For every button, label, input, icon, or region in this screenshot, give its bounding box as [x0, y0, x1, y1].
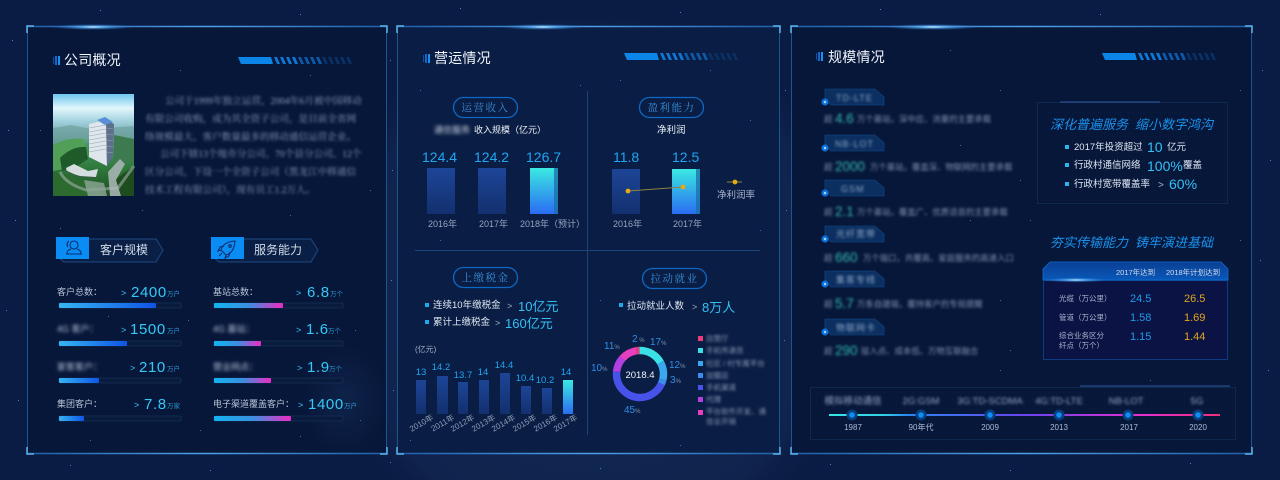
item: IoT cards: 接入点、成本低、万物互联融合	[861, 346, 979, 356]
bar chart: revenue: 2016年	[428, 218, 457, 229]
item: leased lines: 集客专线	[836, 274, 876, 285]
bar chart: tax by year: 14.2	[432, 362, 450, 373]
item: fibre broadband: 超	[824, 253, 833, 263]
metric: total customers: >	[121, 288, 126, 298]
donut legend: 代理	[706, 394, 721, 404]
timeline: NB-LOT	[1109, 396, 1144, 407]
metric: group customers: 集团客户：	[57, 398, 102, 409]
item: TD-LTE: 超	[824, 114, 833, 124]
metric: group customers: >	[134, 400, 139, 410]
timeline: 2009	[981, 423, 999, 432]
heading: transmission: 铸牢演进基础	[1135, 235, 1215, 250]
section: employment	[591, 268, 766, 426]
donut percentages: 2 %	[632, 334, 645, 345]
donut percentages	[591, 334, 686, 416]
metric: service outlets: 1.9	[307, 359, 330, 376]
item: NB-IoT: 2000	[835, 159, 865, 174]
metric: service outlets	[213, 359, 343, 383]
bar chart: net profit: 12.5	[672, 149, 699, 165]
timeline: 5G	[1191, 396, 1203, 407]
tax facts: >	[507, 301, 512, 311]
panel stars	[40, 65, 371, 441]
top glow	[885, 24, 981, 30]
item: fibre broadband: 光纤宽带	[836, 228, 876, 239]
table: transmission capacity: 1.44	[1184, 331, 1205, 343]
donut legend	[698, 333, 766, 426]
tab: service capacity: 服务能力	[254, 242, 302, 257]
tax facts: 10亿元	[518, 299, 558, 314]
timeline: 3G:TD-SCDMA	[957, 396, 1023, 407]
metric: total customers: 万户	[167, 289, 180, 298]
metric: total customers	[57, 284, 181, 308]
item: TD-LTE: TD-LTE	[836, 93, 873, 103]
box: universal service	[1038, 102, 1228, 204]
bar chart: revenue: 2017年	[479, 218, 508, 229]
company description: 技术工程有限公司），现有员工1.2万人。	[145, 184, 315, 196]
metric: base stations	[213, 284, 344, 308]
heading decoration	[1102, 53, 1216, 60]
item: TD-LTE	[821, 89, 992, 126]
pill	[640, 98, 704, 118]
metric: 4G base stations: 1.6	[306, 321, 329, 338]
timeline: 2013	[1050, 423, 1068, 432]
table: transmission capacity: 综合业务区分	[1059, 330, 1104, 340]
top glow	[501, 24, 585, 30]
heading: 营运情况	[434, 50, 491, 66]
pill	[642, 268, 706, 288]
item: GSM: GSM	[841, 184, 865, 194]
company description: 区分公司，下设一个全资子公司（黑龙江中移通信	[145, 166, 356, 178]
chart title: 净利润	[657, 124, 686, 136]
timeline: 90年代	[909, 422, 933, 432]
timeline	[810, 386, 1236, 440]
company description: 公司于1999年独立运营，2004年6月被中国移动	[165, 95, 362, 107]
table: transmission capacity: 光缆（万公里）	[1059, 293, 1112, 303]
table: transmission capacity	[1043, 262, 1228, 360]
donut legend: 自营厅	[706, 333, 729, 343]
heading: transmission	[1050, 235, 1215, 250]
metric: 4G customers: 4G 客户：	[57, 323, 99, 334]
metric: 4G base stations: 万个	[328, 327, 342, 335]
heading: transmission: 夯实传输能力	[1050, 235, 1129, 250]
heading: 缩小数字鸿沟	[1135, 117, 1215, 132]
donut centre label: 2018.4	[625, 370, 655, 381]
panel stars	[410, 70, 761, 446]
company description: 络规模最大、客户数量最多的移动通信运营企业。	[145, 131, 356, 143]
item: GSM: 2.1	[835, 204, 854, 219]
metric: home customers	[57, 359, 181, 383]
item: IoT cards	[821, 319, 979, 358]
table: transmission capacity: 2018年计划达到	[1166, 267, 1220, 277]
bar chart: tax by year: (亿元)	[415, 344, 437, 354]
metric: e-channel customers	[213, 396, 357, 421]
bar chart: tax by year: 2017年	[552, 412, 579, 434]
bar chart: tax by year: 13.7	[454, 370, 472, 381]
company description: 有限公司收购，成为其全资子公司，是目前全省网	[145, 113, 356, 125]
donut legend: 社区 / 村专属平台	[706, 358, 765, 368]
heading decoration	[238, 57, 352, 64]
fact lines: 100%	[1147, 158, 1183, 174]
donut legend: 手机渠道	[706, 382, 736, 392]
donut percentages: 11%	[604, 341, 620, 352]
chart title	[434, 124, 546, 135]
chart title: 通信服务	[434, 124, 470, 135]
metric: service outlets: 营业网点：	[213, 361, 258, 372]
bar chart: net profit	[612, 149, 702, 229]
bar chart: tax by year: 10.2	[536, 375, 554, 386]
timeline: 4G:TD-LTE	[1035, 396, 1083, 407]
fact lines: 60%	[1169, 176, 1197, 192]
item: leased lines: 5.7	[835, 296, 854, 311]
item: leased lines: 超	[824, 299, 833, 309]
donut chart	[616, 350, 664, 398]
table: transmission capacity: 24.5	[1130, 293, 1151, 305]
item: fibre broadband: 660	[835, 250, 858, 265]
metric: home customers: 万户	[167, 364, 180, 373]
photo: headquarters building	[53, 94, 134, 196]
table: transmission capacity: 1.15	[1130, 331, 1151, 343]
donut legend: 信业开销	[706, 416, 736, 426]
item: IoT cards: 290	[835, 343, 858, 358]
donut percentages: 45%	[624, 405, 641, 416]
top glow	[51, 24, 135, 30]
metric: 4G customers: 1500	[130, 321, 166, 338]
metric: base stations: 万个	[330, 290, 344, 298]
timeline: 1987	[844, 423, 862, 432]
metric: service outlets: 万个	[329, 365, 342, 373]
employment fact: 8万人	[702, 300, 735, 315]
item: fibre broadband: 万个端口，共覆高、家庭服务的高速入口	[863, 253, 1014, 263]
pill: 上缴税金	[462, 271, 510, 284]
metric: 4G base stations: 4G 基站：	[213, 323, 255, 334]
donut percentages: 3%	[670, 375, 682, 386]
metric: group customers	[57, 396, 181, 421]
table: transmission capacity: 2017年达到	[1116, 267, 1155, 277]
section: profit	[612, 98, 756, 229]
item: NB-IoT: 万个基站，覆盖深、物联网的主要承载	[870, 162, 1013, 172]
legend: net margin	[717, 180, 756, 201]
metric: home customers: 家客客户：	[57, 361, 102, 372]
metric: 4G customers: 万户	[167, 326, 180, 335]
bar chart: tax by year	[408, 344, 579, 434]
metric: base stations: 6.8	[307, 284, 330, 301]
item: leased lines	[821, 271, 983, 311]
donut percentages: 17%	[650, 337, 667, 348]
icon: rocket	[218, 241, 235, 258]
bar chart: revenue: 124.4	[422, 149, 457, 165]
corner brackets	[791, 26, 1252, 454]
table: transmission capacity: 管道（万公里）	[1059, 312, 1112, 322]
donut percentages: 12%	[669, 360, 686, 371]
item: TD-LTE: 4.6	[835, 111, 854, 126]
icon: users	[66, 241, 82, 254]
bar chart: revenue	[422, 149, 585, 229]
bar chart: tax by year: 13	[416, 367, 426, 378]
fact lines: 覆盖	[1183, 159, 1202, 171]
metric: 4G customers: >	[121, 325, 126, 335]
metric: 4G customers	[57, 321, 181, 346]
donut percentages: 10%	[591, 363, 608, 374]
timeline: 2020	[1189, 423, 1207, 432]
item: NB-IoT	[821, 135, 1013, 174]
fact lines: 亿元	[1167, 141, 1186, 153]
item: IoT cards: 物联网卡	[836, 322, 876, 333]
table: transmission capacity: 1.58	[1130, 312, 1151, 324]
legend: net margin: 净利润率	[717, 189, 756, 201]
tab: customer scale: 客户规模	[100, 242, 148, 257]
panel: company overview	[27, 24, 387, 455]
fact lines: 10	[1147, 139, 1163, 155]
company description: 公司下辖13个地市分公司、70个县分公司、12个	[160, 148, 362, 160]
metric: e-channel customers: 1400	[308, 396, 344, 413]
employment fact: 拉动就业人数	[627, 300, 685, 312]
pill	[454, 98, 518, 118]
donut legend: 手机传递员	[706, 345, 744, 355]
heading: 公司概况	[64, 52, 121, 68]
corner brackets	[27, 26, 387, 454]
fact lines: >	[1158, 180, 1164, 191]
bar chart: tax by year: 14	[561, 367, 571, 378]
tax facts	[425, 299, 558, 331]
corner brackets	[397, 26, 780, 454]
metric: group customers: 万家	[167, 401, 180, 410]
bar chart: tax by year: 14	[478, 367, 488, 378]
metric: e-channel customers: 万户	[344, 401, 357, 410]
tax facts: 累计上缴税金	[433, 316, 491, 328]
item: TD-LTE: 万个基站，深中应、流量的主要承载	[857, 114, 992, 124]
employment fact: >	[692, 302, 697, 312]
metric: total customers: 客户总数：	[57, 286, 102, 297]
section: tax	[408, 268, 579, 434]
heading: 深化普遍服务	[1050, 117, 1129, 132]
item: NB-IoT: 超	[824, 162, 833, 172]
panel: operations	[397, 24, 780, 454]
metric: base stations: >	[296, 288, 301, 298]
timeline: 2017	[1120, 423, 1138, 432]
company description	[145, 95, 362, 196]
metric: e-channel customers: >	[298, 400, 303, 410]
metric: 4G base stations: >	[296, 325, 301, 335]
bar chart: net profit: 11.8	[613, 149, 639, 165]
metric: 4G base stations	[213, 321, 343, 346]
item: GSM: 万个基站，覆盖广、优质语音的主要承载	[857, 207, 1008, 217]
pill	[454, 268, 518, 288]
tax facts: 连续10年缴税金	[433, 299, 501, 311]
timeline: 模拟移动通信	[824, 395, 882, 407]
item: NB-IoT: NB-LOT	[835, 139, 874, 149]
fact lines: 2017年投资超过	[1074, 141, 1143, 153]
metric: home customers: 210	[139, 359, 166, 376]
metric: service outlets: >	[297, 363, 302, 373]
pill: 拉动就业	[650, 272, 698, 285]
bar chart: net profit: 2017年	[673, 218, 702, 229]
bar chart: revenue: 2018年（预计）	[520, 218, 585, 229]
item: IoT cards: 超	[824, 346, 833, 356]
heading	[1050, 117, 1215, 132]
pill: 盈利能力	[648, 101, 696, 114]
bar chart: tax by year: 2013年	[470, 412, 497, 434]
item: GSM: 超	[824, 207, 833, 217]
bar chart: tax by year: 2016年	[532, 412, 559, 434]
item: fibre broadband	[821, 226, 1014, 265]
panel stars	[950, 50, 1241, 381]
item: GSM	[821, 180, 1008, 219]
heading decoration	[624, 53, 738, 60]
bar chart: tax by year: 2015年	[511, 412, 538, 434]
tab: service capacity	[211, 237, 318, 262]
tab: customer scale	[56, 237, 163, 262]
donut legend: 加盟店	[706, 370, 729, 380]
tax facts: 160亿元	[505, 316, 553, 331]
employment fact	[619, 300, 735, 315]
metric: e-channel customers: 电子渠道覆盖客户：	[213, 398, 294, 409]
tax facts: >	[495, 318, 500, 328]
table: transmission capacity: 1.69	[1184, 312, 1205, 324]
donut legend: 平台软件开发、通	[706, 406, 766, 416]
bar chart: revenue: 126.7	[526, 149, 561, 165]
bar chart: tax by year: 2014年	[490, 412, 517, 434]
item: leased lines: 万条自建端，覆持客户的专局提醒	[857, 299, 983, 309]
chart title: 收入规模（亿元）	[474, 124, 546, 135]
metric: group customers: 7.8	[144, 396, 167, 413]
table: transmission capacity: 纤点（万个）	[1059, 340, 1104, 350]
fact lines: 行政村宽带覆盖率	[1074, 178, 1151, 190]
bar chart: net profit: 2016年	[613, 218, 642, 229]
pill: 运营收入	[462, 101, 510, 114]
panel: scale	[791, 24, 1252, 454]
bar chart: tax by year: 14.4	[495, 360, 513, 371]
metric: home customers: >	[130, 363, 135, 373]
bar chart: tax by year: 2012年	[449, 412, 476, 434]
bar chart: tax by year: 2011年	[429, 412, 456, 433]
fact lines	[1065, 139, 1202, 192]
metric: total customers: 2400	[131, 284, 167, 301]
bar chart: tax by year: 2010年	[408, 412, 435, 434]
bar chart: tax by year: 10.4	[516, 373, 534, 384]
heading: 规模情况	[828, 49, 885, 65]
table: transmission capacity: 26.5	[1184, 293, 1205, 305]
section: revenue	[422, 98, 585, 229]
bar chart: revenue: 124.2	[474, 149, 509, 165]
fact lines: 行政村通信网络	[1074, 159, 1141, 171]
metric: base stations: 基站总数：	[213, 286, 258, 297]
timeline: 2G:GSM	[903, 396, 940, 407]
